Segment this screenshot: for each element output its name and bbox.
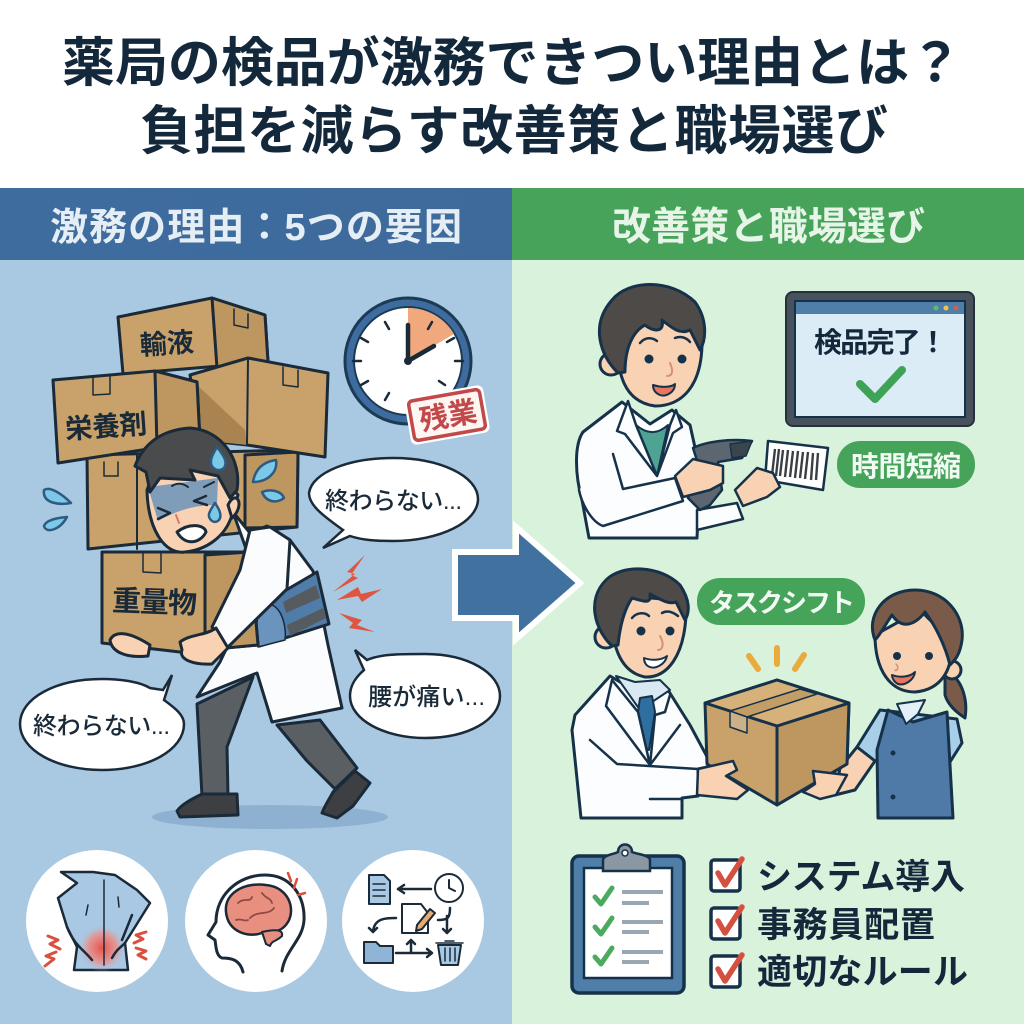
pill: タスクシフト: タスクシフト (709, 588, 855, 618)
illustration: overworked pharmacist with boxes (44, 298, 388, 829)
box: 重量物: 重量物 (111, 585, 198, 620)
speech bubble: 終わらない top (309, 458, 478, 548)
pharmacist hand (697, 761, 748, 799)
box: 輸液 (118, 298, 268, 374)
lapels (617, 401, 682, 476)
icon: brain (185, 850, 327, 992)
box: 栄養剤: 栄養剤 (64, 408, 148, 445)
pharmacist head (135, 428, 239, 552)
shirt and tie (616, 676, 670, 750)
speech bubble: 腰が痛い: 腰が痛い... (368, 684, 485, 711)
stamp: 残業: 残業 (417, 395, 480, 438)
pharmacist lab coat (572, 676, 712, 818)
box: 重量物 (102, 552, 258, 652)
barcode scanner (688, 440, 752, 510)
barcode card (765, 441, 828, 490)
holding hand (735, 468, 780, 506)
icon: lower back pain (26, 850, 168, 992)
checklist: 適切なルール (757, 953, 968, 992)
stamp: 残業 (403, 384, 491, 446)
pharmacist head (599, 284, 705, 406)
lab coat (197, 512, 342, 722)
pill: タスクシフト (697, 578, 865, 625)
back support belt (256, 572, 329, 647)
checklist: システム導入 (757, 858, 965, 897)
title: 負担を減らす改善策と職場選び (140, 102, 888, 161)
woman arm (835, 747, 875, 795)
monitor: 検品完了！ (814, 327, 947, 358)
speech bubble: 腰が痛い (350, 650, 500, 738)
shirt (636, 425, 668, 476)
woman head (872, 590, 962, 692)
panel: causes background (0, 260, 512, 1024)
speech bubble: 終わらない bottom (20, 675, 184, 770)
panel: solutions background (512, 260, 1024, 1024)
woman hand (803, 771, 847, 799)
illustration: handing box over (572, 569, 966, 818)
pharmacist head (595, 569, 688, 677)
arrow (455, 527, 580, 639)
lab coat body (576, 402, 700, 538)
checklist: 事務員配置 (757, 906, 935, 945)
box: 栄養剤 (53, 371, 200, 463)
header: solutions: 改善策と職場選び (612, 206, 925, 249)
hands (110, 628, 228, 664)
header: solutions (512, 188, 1024, 260)
header: causes: 激務の理由：5つの要因 (50, 207, 462, 249)
pill: 時間短縮: 時間短縮 (851, 451, 961, 482)
header: causes (0, 188, 512, 260)
box: right large (190, 358, 328, 457)
coat arm (212, 527, 290, 648)
box: mid stack (87, 450, 298, 549)
box: 輸液: 輸液 (139, 327, 195, 361)
monitor (786, 292, 974, 426)
woman uniform (857, 700, 962, 818)
icon: workflow (342, 850, 484, 992)
illustration: pharmacist scanning barcode (576, 284, 828, 538)
coat sleeve (590, 740, 698, 799)
other sleeve (697, 503, 743, 530)
title (62, 34, 962, 161)
checklist (711, 858, 968, 992)
title: 薬局の検品が激務できつい理由とは？ (62, 34, 962, 93)
clipboard (572, 844, 684, 993)
sweat drops (44, 447, 284, 530)
scanning hand (675, 459, 723, 497)
pain bolts (333, 555, 382, 632)
speech bubble: 終わらない top: 終わらない... (325, 488, 462, 515)
shoes (177, 771, 370, 818)
legs (197, 677, 357, 796)
floor shadow (152, 805, 388, 829)
coat lapels (606, 680, 680, 765)
sparkles (749, 648, 804, 669)
cardboard box (705, 680, 849, 805)
speech bubble: 終わらない bottom: 終わらない... (33, 713, 170, 740)
clock (345, 298, 471, 424)
pill: 時間短縮 (837, 441, 975, 488)
coat sleeve (579, 454, 683, 526)
woman ponytail (945, 672, 966, 718)
